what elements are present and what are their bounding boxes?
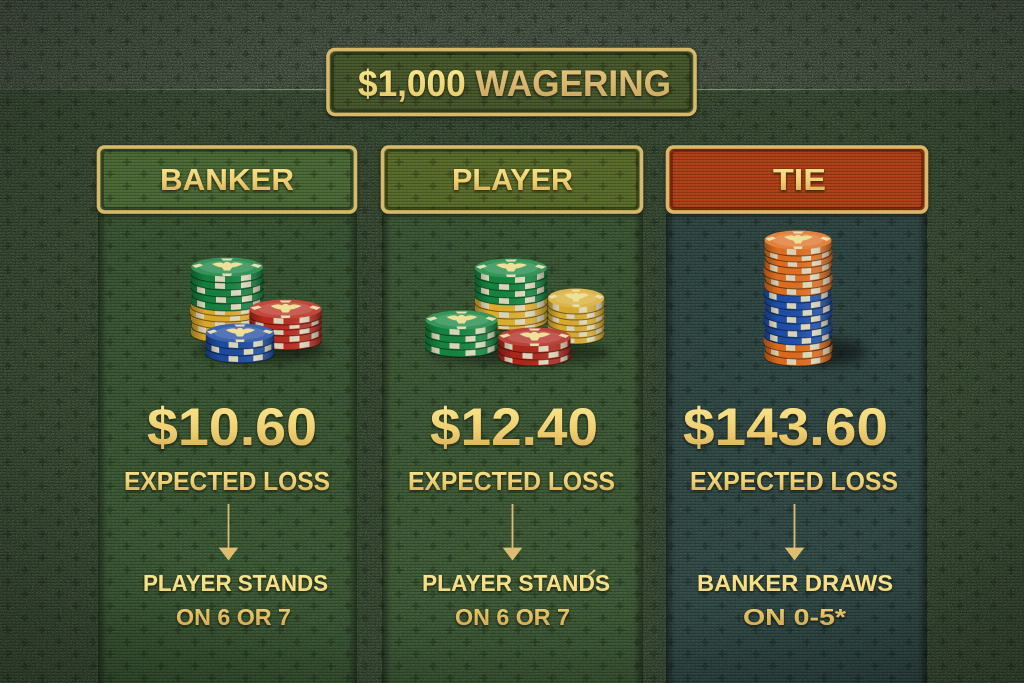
- caption: banker expected loss: EXPECTED LOSS: [124, 466, 330, 496]
- arrow: banker: [220, 504, 236, 559]
- title text: $1,000 WAGERING: [358, 63, 671, 104]
- panel: banker column: [98, 214, 357, 683]
- note: player rule: ON 6 OR 7: [455, 604, 570, 630]
- note: player rule: PLAYER STANDS: [422, 570, 610, 596]
- title box: [328, 50, 695, 114]
- header: banker: [98, 147, 356, 212]
- caption: tie expected loss: EXPECTED LOSS: [690, 466, 898, 496]
- amount: tie: $143.60: [683, 398, 888, 457]
- stray accent mark: [587, 570, 595, 577]
- note: tie rule: BANKER DRAWS: [697, 570, 893, 596]
- label: banker: BANKER: [160, 162, 294, 197]
- note: banker rule: PLAYER STANDS: [143, 570, 328, 596]
- banker values: [124, 398, 330, 630]
- player values: [408, 398, 615, 630]
- note: banker rule: ON 6 OR 7: [176, 604, 291, 630]
- amount: banker: $10.60: [147, 398, 317, 457]
- panel: tie column: [666, 214, 927, 683]
- label: player: PLAYER: [452, 162, 573, 197]
- icon: banker chip stacks: [190, 258, 326, 363]
- tie values: [683, 398, 898, 630]
- icon: player chip stacks: [426, 258, 610, 366]
- arrow: player: [504, 504, 520, 559]
- amount: player: $12.40: [430, 398, 598, 457]
- panel: player column: [382, 214, 643, 683]
- arrow: tie: [786, 504, 802, 559]
- label: tie: TIE: [773, 162, 826, 197]
- header: player: [382, 147, 642, 212]
- caption: player expected loss: EXPECTED LOSS: [408, 466, 615, 496]
- note: tie rule: ON 0-5*: [743, 604, 846, 630]
- icon: tie chip stack: [764, 230, 866, 366]
- header: tie: [668, 147, 926, 212]
